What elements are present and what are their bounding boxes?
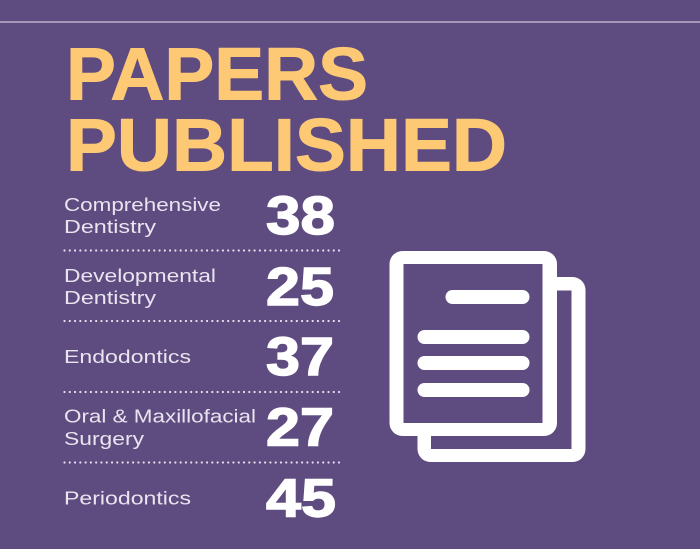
row: Comprehensive Dentistry: 38 — [266, 186, 335, 246]
row: Endodontics: Endodontics — [64, 346, 191, 367]
row: Periodontics: Periodontics — [64, 488, 191, 508]
row: Oral & Maxillofacial Surgery: Oral & Maxillofacial — [64, 406, 256, 426]
title: PAPERS — [66, 32, 368, 116]
title — [66, 32, 507, 186]
row: Developmental Dentistry: 25 — [266, 257, 334, 317]
row: Comprehensive Dentistry: Dentistry — [64, 216, 157, 237]
row: Endodontics: 37 — [266, 327, 334, 387]
title: PUBLISHED — [66, 104, 507, 186]
row: Periodontics: 45 — [266, 468, 336, 528]
row: Endodontics — [64, 327, 334, 387]
row: Developmental Dentistry — [64, 257, 334, 317]
row: Comprehensive Dentistry — [64, 186, 335, 246]
row: Periodontics — [64, 468, 336, 528]
row: Developmental Dentistry: Dentistry — [64, 287, 157, 308]
row: Oral & Maxillofacial Surgery: Surgery — [64, 428, 145, 449]
row: Developmental Dentistry: Developmental — [64, 265, 216, 286]
row: Oral & Maxillofacial Surgery: 27 — [266, 398, 334, 458]
icon: stacked documents — [390, 251, 586, 462]
row: Oral & Maxillofacial Surgery — [64, 398, 334, 458]
row: Comprehensive Dentistry: Comprehensive — [64, 194, 221, 215]
